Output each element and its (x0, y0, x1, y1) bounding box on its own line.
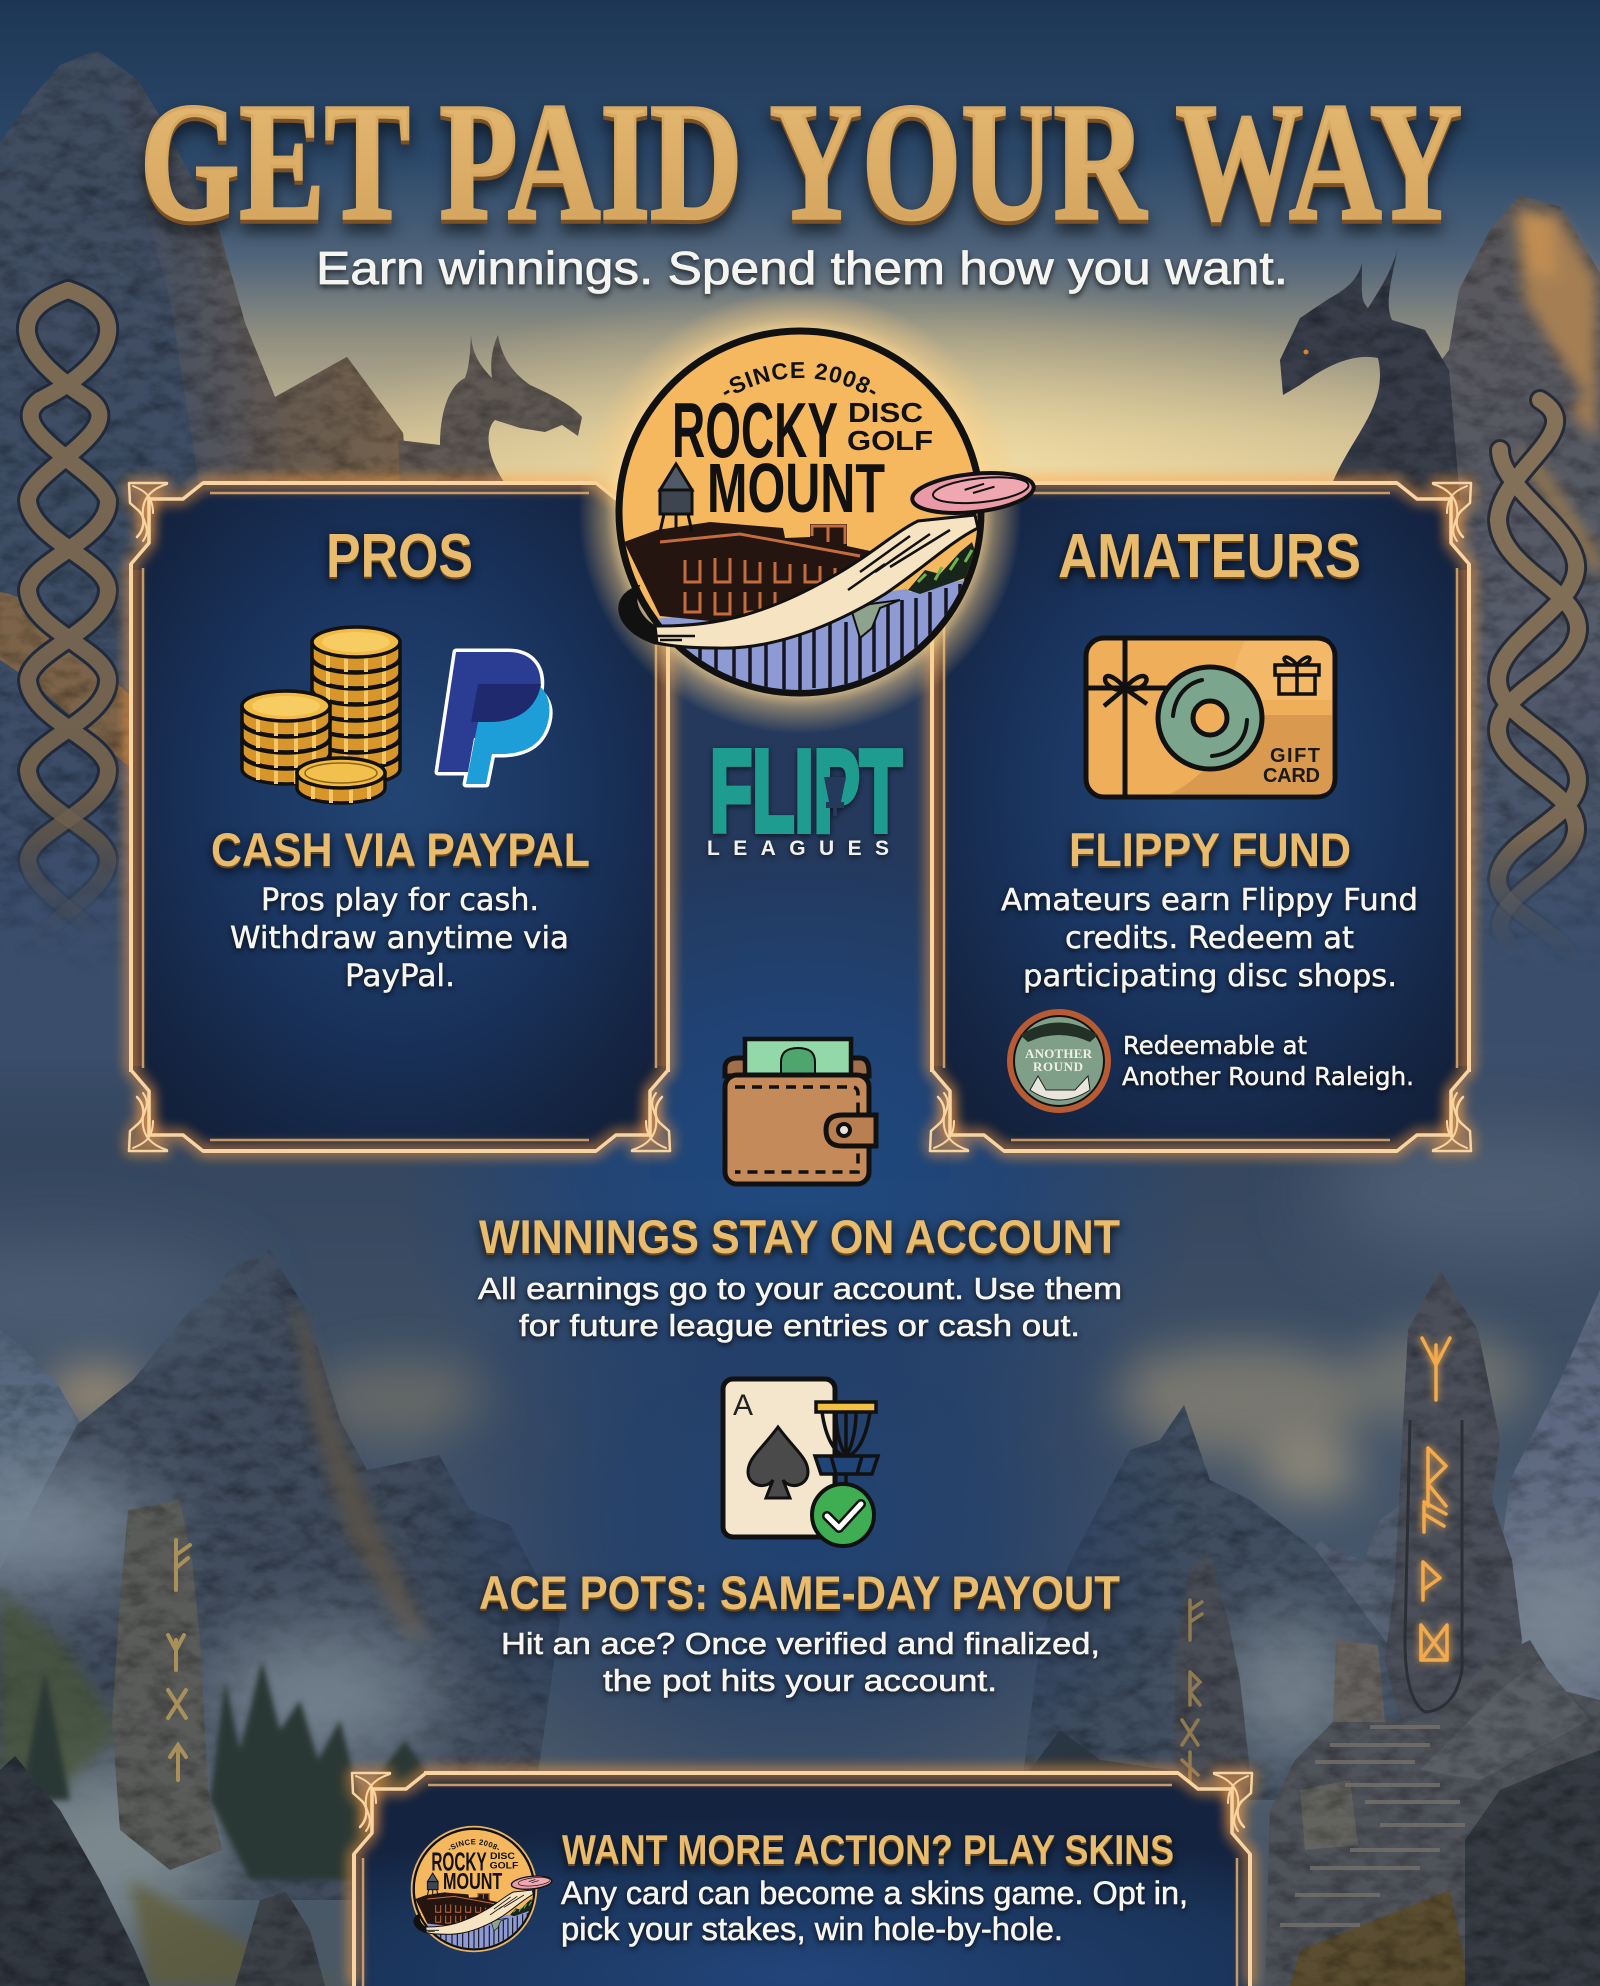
logo glow (578, 290, 1022, 734)
text: pros description (230, 883, 569, 994)
logo: small rocky mount: MOUNT (443, 1868, 502, 1894)
background: sky glow behind logo (280, 280, 1520, 720)
text: amateurs description (1001, 883, 1418, 994)
background: fog banks (0, 1120, 1600, 1940)
heading: pros: PROS (326, 522, 473, 591)
logo: small rocky mount: GOLF (490, 1860, 519, 1870)
background: upper left cliff (0, 50, 408, 1010)
background: sky (0, 0, 1600, 560)
subtitle: Earn winnings. Spend them how you want. (316, 242, 1288, 294)
illustration: right dragon (1280, 248, 1460, 500)
logo: small rocky mount: -SINCE 2008- (448, 1839, 500, 1850)
icon: gift card: CARD (1263, 765, 1320, 787)
background: green hillside and pines (0, 1590, 1170, 1986)
icon: ace card and disc golf basket (723, 1379, 878, 1546)
text: amateurs description: Amateurs earn Flippy Fund (1001, 883, 1418, 918)
section: ace pots (479, 1566, 1120, 1698)
background: fog band below cliffs (0, 840, 1600, 1140)
text: skins description: Any card can become a skins game. Opt in, (561, 1875, 1188, 1911)
illustration: middle rune stone (1173, 1551, 1252, 1790)
illustration: stairs and rocks lower right (1265, 1640, 1600, 1986)
icon: gold coins (242, 627, 400, 803)
section: winnings stay on account: WINNINGS STAY ON ACCOUNT (479, 1210, 1120, 1263)
text: pros description: Pros play for cash. (261, 883, 539, 918)
icon: wallet (725, 1039, 876, 1184)
logo: rocky mount disc golf: -SINCE 2008- (723, 362, 876, 396)
badge: another round: ANOTHER (1025, 1046, 1093, 1061)
illustration: main right rune stone (1385, 1270, 1522, 1725)
text: amateurs description: participating disc shops. (1023, 959, 1397, 994)
illustration: stone steps (1280, 1727, 1465, 1925)
section: ace pots: the pot hits your account. (603, 1663, 997, 1698)
logo: rocky mount disc golf: DISC (848, 397, 923, 428)
icon: paypal (438, 652, 550, 784)
section: ace pots: ACE POTS: SAME-DAY PAYOUT (479, 1566, 1120, 1619)
logo: rocky mount disc golf (616, 328, 1036, 696)
logo: rocky mount disc golf: GOLF (847, 425, 933, 456)
text: pros description: Withdraw anytime via (230, 921, 569, 956)
illustration: left dragon (398, 335, 582, 490)
panel: skins callout (339, 1758, 1264, 1986)
text: pros description: PayPal. (345, 959, 455, 994)
logo: rocky mount disc golf: ROCKY (672, 386, 838, 474)
icon: gift card: GIFT (1270, 745, 1320, 767)
decoration: left mountain sunlit ridge (290, 1300, 430, 1640)
background: warm sky gaps in lower valley (45, 1330, 1530, 1500)
decoration: left celtic knot (27, 290, 108, 940)
logo: rocky mount disc golf: MOUNT (707, 449, 885, 527)
badge: another round: ROUND (1033, 1059, 1083, 1074)
subheading: flippy fund: FLIPPY FUND (1069, 823, 1351, 876)
text: skins description: pick your stakes, win hole-by-hole. (561, 1911, 1063, 1947)
illustration: left rune stone (112, 1500, 222, 1870)
panel: pros (129, 483, 670, 1151)
background: distant peaks (0, 1290, 1600, 1720)
section: winnings stay on account: for future league entries or cash out. (519, 1308, 1080, 1343)
decoration: right celtic knot (1498, 400, 1578, 960)
text: amateurs description: credits. Redeem at (1065, 921, 1354, 956)
background: upper right cliff (1326, 195, 1600, 1010)
logo: flipt leagues: LEAGUES (707, 837, 889, 860)
icon: ace card and disc golf basket: A (733, 1389, 753, 1422)
background: left mountain (0, 1250, 560, 1900)
background: lower valley (0, 940, 1600, 1986)
background: right mountain (1020, 1405, 1420, 1800)
logo: flipt leagues: FLIPT (710, 726, 902, 856)
subheading: cash via paypal: CASH VIA PAYPAL (211, 823, 590, 876)
heading: want more action: WANT MORE ACTION? PLAY SKINS (562, 1826, 1174, 1873)
decoration: right cliff sunlight (1515, 210, 1600, 580)
section: winnings stay on account (478, 1210, 1122, 1343)
section: ace pots: Hit an ace? Once verified and finalized, (501, 1626, 1100, 1661)
text: redeemable note (1122, 1031, 1414, 1091)
text: redeemable note: Redeemable at (1123, 1031, 1307, 1060)
badge: another round (1010, 1012, 1108, 1110)
section: winnings stay on account: All earnings go to your account. Use them (478, 1271, 1122, 1306)
illustration: bottom left rocks (0, 1756, 325, 1986)
background: central blue column (400, 600, 1200, 1840)
text: redeemable note: Another Round Raleigh. (1122, 1062, 1414, 1091)
logo: flipt leagues (707, 726, 902, 860)
logo: small rocky mount (410, 1826, 552, 1952)
icon: gift card (1086, 638, 1335, 797)
panel: amateurs (930, 483, 1471, 1151)
logo: small rocky mount: DISC (490, 1851, 515, 1861)
heading: amateurs: AMATEURS (1058, 522, 1361, 591)
text: skins description (561, 1875, 1188, 1947)
logo: small rocky mount: ROCKY (431, 1847, 487, 1877)
